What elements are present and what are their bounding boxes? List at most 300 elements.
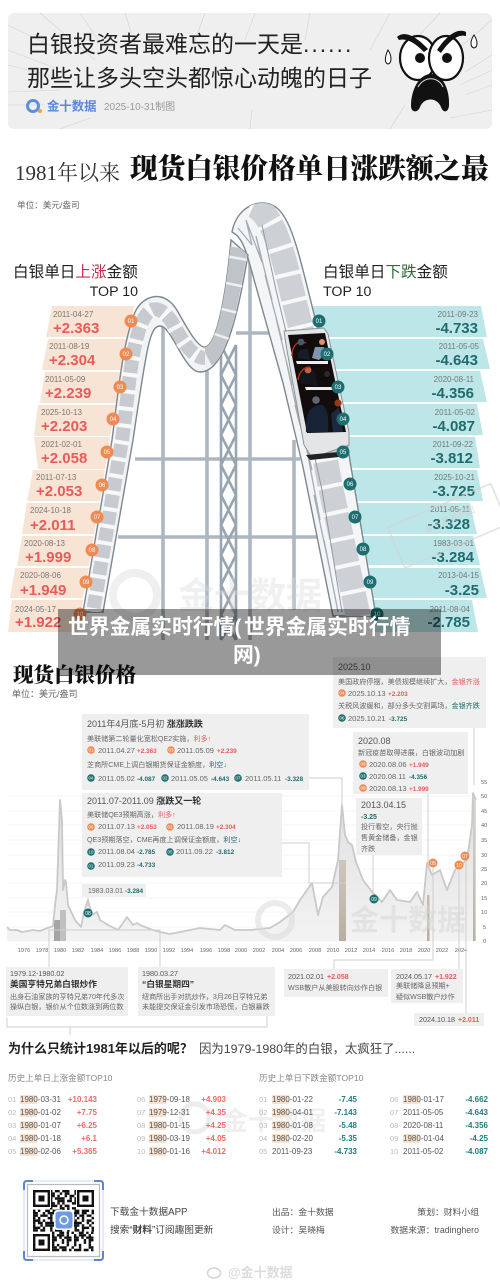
QR code — [24, 1181, 103, 1260]
callout: Jul-Sep 2011: 2011.07.13 — [98, 822, 135, 831]
callout: April-May 2011: 2011.05.02 — [98, 774, 135, 783]
callout: 2013.04.15: -3.25 — [361, 814, 377, 821]
chart y axis: 25 — [481, 867, 487, 873]
chart x axis: 2024 — [455, 948, 467, 954]
chart x axis: 2022 — [436, 948, 448, 954]
loss table rows: 07 — [390, 1108, 398, 1117]
callout: 2025.10: 04 — [340, 691, 345, 696]
loss table rows: -5.48 — [339, 1121, 358, 1130]
loss table rows: -4.733 — [334, 1147, 358, 1156]
overlay caption bar: 网) — [233, 644, 261, 667]
callout: April-May 2011: 2011.04.27 — [98, 746, 135, 755]
header title: 白银投资者最难忘的一天是...... — [27, 31, 353, 57]
gain 09: 09 — [83, 580, 90, 586]
download text: 下载金十数据APP — [110, 1205, 188, 1218]
callout: April-May 2011: 芝商所CME上调白银期货保证金额度，利空↓ — [87, 760, 227, 769]
gain table rows: +6.25 — [77, 1121, 98, 1130]
gain 05: +2.058 — [41, 450, 87, 467]
gain table rows: +10.143 — [68, 1095, 98, 1104]
chart x axis — [18, 948, 467, 954]
loss table rows: -4.25 — [470, 1134, 489, 1143]
chart y axis: 5 — [483, 925, 486, 931]
loss 04: -4.087 — [432, 418, 475, 435]
gain table rows: +4.25 — [206, 1121, 227, 1130]
callout: Hunt brothers — [6, 967, 128, 1016]
callout: Jul-Sep 2011 — [82, 793, 282, 877]
chart x axis: 1976 — [18, 948, 30, 954]
chart x axis: 2006 — [290, 948, 302, 954]
loss table rows: 01 — [259, 1095, 267, 1104]
loss table rows: 02 — [259, 1108, 267, 1117]
gain 06: +2.053 — [36, 483, 82, 500]
loss 05 — [336, 440, 474, 467]
chart y axis: 30 — [481, 853, 487, 859]
loss table rows: 1980-02-20 — [272, 1134, 313, 1143]
table: historic top 10 losses: 历史上单日下跌金额TOP10 — [259, 1072, 364, 1083]
gain table rows: 1980-01-18 — [20, 1134, 61, 1143]
credits: 出品：金十数据 — [272, 1206, 334, 1217]
table watermark — [181, 1104, 326, 1136]
gain 01 — [53, 310, 138, 337]
callout: 2025.10: 2025.10.21 — [348, 714, 386, 723]
chart y axis: 0 — [483, 939, 486, 945]
gain 05: 05 — [104, 450, 111, 456]
callout: 2020.08: 09 — [361, 762, 366, 767]
callout: Jul-Sep 2011: 2011.07-2011.09 涨跌又一轮 — [87, 795, 201, 806]
gain 03 — [45, 375, 126, 402]
gain 09: 2020-08-06 — [20, 571, 61, 580]
chart x axis: 1982 — [72, 948, 84, 954]
callout: Silver Thursday: “白银星期四” — [142, 978, 194, 989]
falling heading: TOP 10 — [323, 284, 371, 300]
callout: Jul-Sep 2011: -2.785 — [137, 849, 156, 856]
callout: Jul-Sep 2011: 10 — [89, 850, 94, 855]
gain table rows: 10 — [137, 1147, 145, 1156]
gain 07: 2024-10-18 — [30, 506, 71, 515]
loss 03 — [332, 375, 475, 402]
gain table rows: 05 — [8, 1147, 16, 1156]
gain 10: 10 — [77, 612, 84, 618]
callout: April-May 2011: 2011.05.05 — [171, 774, 208, 783]
gain table rows: 1980-03-31 — [20, 1095, 61, 1104]
main title: 1981年以来 — [15, 161, 120, 185]
callout: 2025.10: -3.725 — [389, 716, 408, 723]
gain table rows: +6.1 — [81, 1134, 98, 1143]
overlay caption bar — [58, 609, 441, 675]
loss 05: 2011-09-22 — [433, 440, 474, 449]
callout: Jul-Sep 2011: +2.053 — [137, 824, 157, 831]
loss table rows: 06 — [390, 1095, 398, 1104]
loss table rows: 04 — [259, 1134, 267, 1143]
callout: April-May 2011: 04 — [89, 776, 94, 781]
gain 05 — [41, 440, 114, 467]
callout: April-May 2011: -4.087 — [137, 776, 156, 783]
chart x axis: 1984 — [91, 948, 103, 954]
callout: 2021.02.01: 2021.02.01 — [288, 972, 324, 981]
stamp watermark: 金十数据制图 — [422, 504, 476, 535]
overlay caption bar: 世界金属实时行情( — [68, 615, 241, 639]
stamp watermark — [388, 484, 500, 568]
gain table rows: 06 — [137, 1095, 145, 1104]
loss table rows: 1980-01-04 — [403, 1134, 444, 1143]
gain 07: 07 — [94, 515, 101, 521]
loss table rows — [259, 1095, 489, 1156]
loss table rows: 2020-08-11 — [403, 1121, 444, 1130]
gain rows — [15, 310, 138, 631]
gain 06: 2011-07-13 — [36, 473, 77, 482]
loss 04: 2011-05-02 — [435, 408, 476, 417]
gain table rows: +5.365 — [72, 1147, 98, 1156]
loss 07: 07 — [352, 515, 359, 521]
callout: 2025.10: 2025.10 — [338, 662, 371, 672]
loss 04: 04 — [340, 417, 347, 423]
loss 07: -3.328 — [427, 516, 470, 533]
chart x axis: 1986 — [109, 948, 121, 954]
chart x axis: 1980 — [54, 948, 66, 954]
gain 08: +1.999 — [25, 549, 71, 566]
callout: April-May 2011: 2011.05.09 — [177, 746, 214, 755]
gain table rows: 07 — [137, 1108, 145, 1117]
callout: Silver Thursday — [138, 967, 275, 1016]
gain 06: 06 — [99, 483, 106, 489]
gain table rows: 1980-03-19 — [149, 1134, 190, 1143]
callout: 2024.10.18: +2.011 — [458, 1017, 479, 1024]
callout: 2024.05.17: 疑似WSB散户炒作 — [396, 992, 455, 1001]
chart x axis: 2018 — [400, 948, 412, 954]
gain 02 — [49, 342, 132, 369]
gain 08: 2020-08-13 — [24, 539, 65, 548]
callout: Silver Thursday: 纽商所出手对抗炒作，3月26日亨特兄弟 — [142, 992, 267, 1001]
gain table rows: 1979-09-18 — [149, 1095, 190, 1104]
credits: 设计：吴晓梅 — [272, 1224, 325, 1235]
loss table rows: 08 — [390, 1121, 398, 1130]
chart x axis: 2010 — [327, 948, 339, 954]
callout: Silver Thursday: 未能提交保证金引发市场恐慌，白银暴跌 — [142, 1002, 270, 1011]
loss table rows: 2011-05-05 — [403, 1108, 444, 1117]
loss table rows: 10 — [390, 1147, 398, 1156]
why only since 1981 heading: 因为1979-1980年的白银，太疯狂了...... — [199, 1041, 415, 1056]
callout: Hunt brothers: 美国亨特兄弟白银炒作 — [10, 978, 97, 989]
callout: 2025.10: 美国政府停摆，美债规模继续扩大，金银齐涨 — [338, 677, 480, 686]
download text: 搜索“财料”订阅趣图更新 — [110, 1223, 214, 1236]
callout: 1983.03.01: 1983.03.01 -3.284 — [88, 888, 144, 895]
loss 06: 2025-10-21 — [434, 473, 476, 482]
falling heading — [323, 263, 448, 300]
table watermark: 金十数据 — [222, 1106, 326, 1136]
header title — [27, 31, 372, 91]
gain table rows: 04 — [8, 1134, 16, 1143]
callout: April-May 2011: 03 — [169, 748, 174, 753]
loss 05: 05 — [340, 450, 347, 456]
gain table rows: 1980-01-02 — [20, 1108, 61, 1117]
gain 10 — [15, 605, 86, 631]
gain 10: 2024-05-17 — [15, 605, 56, 614]
chart x axis: 1992 — [163, 948, 175, 954]
callout: 2013.04.15 — [356, 798, 422, 855]
credits — [272, 1206, 479, 1235]
loss 06 — [344, 473, 476, 500]
loss 01: -4.733 — [435, 320, 478, 337]
gain 05: 2021-02-01 — [41, 440, 82, 449]
roller coaster main arch — [232, 203, 376, 620]
chart x axis: 1978 — [36, 948, 48, 954]
callout: Hunt brothers: 出身石油家族的亨特兄弟70年代多次 — [10, 992, 124, 1001]
gain 04: 2025-10-13 — [41, 408, 82, 417]
chart y axis: 10 — [481, 910, 487, 916]
chart y axis: 50 — [481, 794, 487, 800]
falling heading: 白银单日下跌金额 — [323, 263, 448, 281]
table: historic top 10 losses — [259, 1072, 489, 1156]
falling bars panel: top 10 losses — [305, 306, 490, 632]
callout: April-May 2011: 02 — [163, 776, 168, 781]
callout: 2024.10.18: 2024.10.18 — [419, 1015, 455, 1024]
gain 01: 2011-04-27 — [53, 310, 94, 319]
callout: Jul-Sep 2011: -4.733 — [137, 862, 156, 869]
loss table rows: 05 — [259, 1147, 267, 1156]
loss 09 — [364, 571, 480, 599]
chart x axis: 2014 — [363, 948, 375, 954]
callout: 2020.08: 2020.08.06 — [369, 760, 407, 769]
chart y axis: 20 — [481, 881, 487, 887]
roller coaster left hump track — [83, 240, 248, 612]
section unit: 单位：美元/盎司 — [12, 688, 78, 699]
chart x axis: 1994 — [181, 948, 193, 954]
logo and date: 金十数据 — [47, 98, 97, 114]
loss table rows: -4.643 — [465, 1108, 489, 1117]
callout: Jul-Sep 2011: 02 — [168, 825, 173, 830]
loss table rows: -7.143 — [334, 1108, 358, 1117]
callout: 2021.02.01: WSB散户从美股转向炒作白银 — [288, 983, 382, 992]
callout: Jul-Sep 2011: 2011.08.19 — [177, 822, 214, 831]
callout: 2024.05.17: 2024.05.17 — [396, 972, 432, 981]
gain table rows: 1980-01-16 — [149, 1147, 190, 1156]
download text — [110, 1205, 214, 1236]
gain table rows: +4.05 — [206, 1134, 227, 1143]
gain 07: +2.011 — [30, 517, 75, 534]
loss 08: -3.284 — [431, 549, 475, 566]
gain 08: 08 — [89, 548, 96, 554]
callout: Jul-Sep 2011: 05 — [168, 850, 173, 855]
loss 10: 2011-08-04 — [430, 605, 471, 614]
loss 01: 01 — [316, 319, 323, 325]
callout: 2025.10: +2.203 — [388, 691, 408, 698]
chart marker circles: 07 — [462, 854, 468, 860]
loss rows — [312, 310, 480, 631]
chart x axis: 1998 — [218, 948, 230, 954]
loss 09: 2013-04-15 — [438, 571, 480, 580]
gain 04 — [41, 408, 120, 435]
loss 09: -3.25 — [445, 582, 479, 599]
loss 03: 2020-08-11 — [434, 375, 475, 384]
callout: 2024.10.18 — [414, 1013, 484, 1026]
loss 02: 2011-05-05 — [439, 342, 480, 351]
gain table rows: 02 — [8, 1108, 16, 1117]
callout: 2024.05.17: 美联储降息预期+ — [396, 981, 450, 990]
loss table rows: 1980-01-17 — [403, 1095, 444, 1104]
icon: shocked face — [385, 31, 477, 111]
callout: April-May 2011: 美联储第二轮量化宽松QE2实施，利多↑ — [87, 734, 211, 743]
loss 08: 1983-03-01 — [433, 539, 475, 548]
chart marker circles: 05 — [430, 861, 436, 867]
chart marker circles: 10 — [456, 863, 462, 869]
gain 09 — [20, 571, 92, 599]
chart x axis: 2002 — [253, 948, 265, 954]
logo and date — [28, 98, 175, 114]
callout: 2024.05.17: +1.922 — [435, 974, 457, 981]
event bands — [54, 800, 476, 941]
callout: 2013.04.15: 齐跌 — [361, 844, 375, 853]
why only since 1981 heading: 为什么只统计1981年以后的呢？ — [8, 1041, 193, 1056]
scaffold towers — [118, 245, 320, 640]
callout: April-May 2011: -4.643 — [211, 776, 230, 783]
gain table rows: 03 — [8, 1121, 16, 1130]
callout: April-May 2011: +2.363 — [137, 748, 157, 755]
loss 02: 02 — [324, 352, 331, 358]
price area — [7, 793, 476, 941]
callout: April-May 2011: 2011年4月底-5月初 涨涨跌跌 — [87, 718, 203, 729]
loss table rows: -4.087 — [465, 1147, 489, 1156]
gain 03: +2.239 — [45, 385, 91, 402]
chart marker circles — [84, 852, 470, 918]
chart y axis: 15 — [481, 896, 487, 902]
why only since 1981 heading — [8, 1041, 415, 1056]
callout: April-May 2011: -3.328 — [285, 776, 304, 783]
leader lines — [7, 728, 474, 1035]
loss table rows: 2011-05-02 — [403, 1147, 444, 1156]
loss table rows: 1980-01-22 — [272, 1095, 313, 1104]
callout: 2020.08: -4.356 — [409, 774, 428, 781]
callout: 2020.08: 2020.08.11 — [369, 772, 406, 781]
loss 06: -3.725 — [432, 483, 475, 500]
watermark over coaster — [113, 573, 322, 617]
rising heading: TOP 10 — [90, 284, 138, 300]
gain 09: +1.949 — [20, 582, 66, 599]
callout: Jul-Sep 2011: QE3预期落空，CME再度上调保证金额度，利空↓ — [87, 835, 241, 844]
callout: Jul-Sep 2011: 2011.09.23 — [98, 860, 135, 869]
gain 04: 04 — [110, 417, 117, 423]
overlay caption bar: 世界金属实时行情 — [244, 615, 411, 639]
price line — [7, 793, 476, 934]
loss 09: 09 — [367, 580, 374, 586]
callout: Jul-Sep 2011: 美联储QE3预期高涨，利多↑ — [87, 810, 176, 819]
gain table rows: +7.75 — [77, 1108, 98, 1117]
chart y axis: 45 — [481, 809, 487, 815]
callout: April-May 2011: +2.239 — [217, 748, 237, 755]
chart x axis: 1990 — [145, 948, 157, 954]
chart x axis: 2004 — [272, 948, 284, 954]
callout: Jul-Sep 2011: 06 — [89, 825, 94, 830]
chart x axis: 2000 — [235, 948, 247, 954]
chart x axis: 2012 — [345, 948, 357, 954]
gain 03: 2011-05-09 — [45, 375, 86, 384]
callout: 2013.04.15: 投行看空，央行抛 — [361, 822, 418, 831]
callout: 2025.10: 关税风波缓和，部分多头交割离场，金银齐跌 — [338, 701, 480, 710]
gain table rows: 1980-01-15 — [149, 1121, 190, 1130]
header panel — [8, 13, 492, 129]
chart x axis: 1988 — [127, 948, 139, 954]
unit label: 单位：美元/盎司 — [17, 199, 80, 210]
loss 04 — [336, 408, 476, 435]
gain table rows: +4.012 — [201, 1147, 227, 1156]
table: historic top 10 gains: 历史上单日上涨金额TOP10 — [8, 1072, 113, 1083]
table: historic top 10 gains — [8, 1072, 227, 1156]
rising heading — [13, 263, 138, 300]
callout: 2020.08: 2020.08.13 — [369, 784, 407, 793]
callout: 2025.10: 2025.10.13 — [348, 689, 386, 698]
callout: 2025.10: 06 — [340, 716, 345, 721]
callout: April-May 2011: 2011.05.11 — [245, 774, 281, 783]
gain table rows: 1980-02-06 — [20, 1147, 61, 1156]
section title: silver price: 现货白银价格 — [13, 663, 136, 687]
loss 10 — [370, 605, 471, 631]
loss 01 — [312, 310, 479, 337]
loss 06: 06 — [347, 482, 354, 488]
callout: 2025.10 — [333, 657, 486, 728]
loss table rows: -4.662 — [465, 1095, 489, 1104]
callout: 2013.04.15: 2013.04.15 — [361, 800, 406, 810]
loss table rows: 1980-01-08 — [272, 1121, 313, 1130]
callout: 2020.08: 2020.08 — [358, 736, 391, 746]
loss table rows: 09 — [390, 1134, 398, 1143]
gain 06 — [36, 473, 108, 500]
loss table rows: 03 — [259, 1121, 267, 1130]
loss table rows: -7.45 — [339, 1095, 358, 1104]
gain table rows: 1979-12-31 — [149, 1108, 190, 1117]
callout: Jul-Sep 2011: 2011.09.22 — [176, 847, 213, 856]
loss 07 — [348, 505, 471, 533]
gain 01: 01 — [128, 319, 135, 325]
loss 07: 2011-05-11 — [430, 505, 471, 514]
price chart — [7, 728, 487, 1035]
watermark over coaster: 金十数据 — [178, 575, 322, 616]
gain table rows — [8, 1095, 227, 1156]
credits: 策划：财料小组 — [417, 1206, 479, 1217]
chart marker circles: 08 — [85, 911, 91, 917]
loss table rows: 2011-09-23 — [272, 1147, 313, 1156]
chart y axis: 55 — [481, 780, 487, 786]
roller coaster car with riders — [284, 328, 349, 460]
gain 03: 03 — [117, 385, 124, 391]
gain 02: 02 — [123, 352, 130, 358]
loss 03: -4.356 — [431, 385, 474, 402]
callout: 2020.08 — [353, 732, 468, 794]
callout: Hunt brothers: 1979.12-1980.02 — [10, 969, 64, 978]
loss 08: 08 — [360, 547, 367, 553]
loss 02: -4.643 — [435, 352, 478, 369]
chart y axis: 40 — [481, 823, 487, 829]
loss 05: -3.812 — [430, 450, 473, 467]
gain 04: +2.203 — [41, 418, 87, 435]
callout: 2021.02.01: +2.058 — [327, 974, 349, 981]
gain 08 — [24, 539, 98, 566]
callout: April-May 2011: 07 — [236, 776, 241, 781]
chart y axis: 35 — [481, 838, 487, 844]
callout: 2020.08: 新冠疫苗取得进展，白银波动加剧 — [358, 748, 464, 757]
loss 01: 2011-09-23 — [438, 310, 479, 319]
callout: 2020.08: 08 — [361, 786, 366, 791]
callout: Jul-Sep 2011: 01 — [89, 864, 94, 869]
loss 10: -2.785 — [427, 614, 470, 631]
callout: 2024.05.17 — [391, 969, 463, 1003]
header title: 那些让多头空头都惊心动魄的日子 — [27, 65, 372, 91]
callout: 2020.08: 03 — [361, 774, 366, 779]
gain table rows: 01 — [8, 1095, 16, 1104]
gain table rows: +4.35 — [206, 1108, 227, 1117]
callout: 2020.08: +1.949 — [409, 762, 429, 769]
loss table rows: -5.35 — [339, 1134, 358, 1143]
rising bars panel: top 10 gains — [8, 306, 134, 632]
callout: Silver Thursday: 1980.03.27 — [142, 969, 178, 978]
